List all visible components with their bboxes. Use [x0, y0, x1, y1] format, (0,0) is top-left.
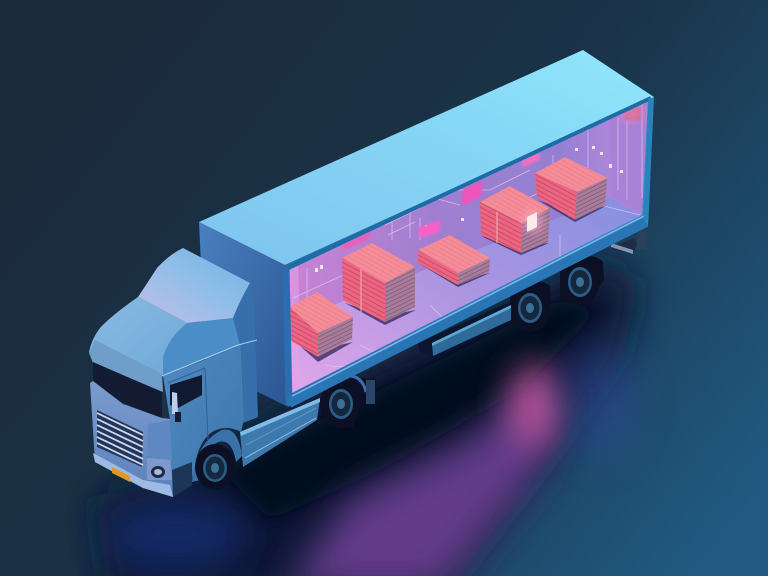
wheel arch	[192, 430, 242, 482]
bumper	[93, 453, 173, 497]
floor reflection and shadow	[95, 260, 640, 576]
roof fairing	[138, 248, 250, 323]
tractor front wheel	[195, 444, 235, 490]
cargo box 3	[418, 235, 490, 287]
cab steps	[172, 462, 192, 497]
tractor rear wheel	[320, 376, 376, 428]
side frame	[285, 97, 654, 407]
truck cab	[89, 248, 258, 497]
door window	[170, 375, 202, 408]
tractor chassis skirt	[240, 398, 320, 467]
floor	[289, 198, 642, 393]
mirror	[172, 392, 181, 422]
glowing light	[524, 212, 542, 232]
cargo box 4	[480, 186, 550, 255]
trailer front face	[199, 222, 288, 407]
cab door side	[163, 346, 243, 497]
trailer body	[199, 50, 654, 407]
grille slats	[97, 413, 143, 465]
trailer side skirt	[418, 302, 511, 356]
trailer opening frame	[286, 98, 651, 405]
cargo box 5	[535, 157, 607, 222]
circuit lines	[293, 104, 642, 380]
rear hitch bar	[610, 230, 646, 254]
cargo box 2	[342, 243, 416, 325]
front pillar	[147, 420, 172, 460]
cab crease	[162, 340, 257, 376]
trailer roof	[199, 50, 654, 265]
cargo interior	[289, 96, 650, 395]
back wall	[290, 102, 648, 318]
visor band	[89, 340, 163, 392]
end wall	[618, 102, 648, 214]
trailer middle wheel	[510, 281, 551, 332]
cab roof	[89, 297, 187, 376]
sleeper side	[163, 318, 240, 376]
license plate	[112, 467, 130, 482]
sparkle dots	[315, 146, 623, 272]
grille panel	[97, 410, 143, 467]
trailer rear wheel	[560, 256, 604, 305]
cargo box 1	[290, 292, 353, 362]
rear cab panel	[233, 283, 258, 423]
headlight	[147, 458, 172, 480]
windshield	[93, 362, 162, 418]
glowing panels	[342, 104, 644, 250]
grille housing	[90, 381, 173, 497]
door outline	[168, 368, 208, 440]
left wall glow	[290, 266, 299, 393]
